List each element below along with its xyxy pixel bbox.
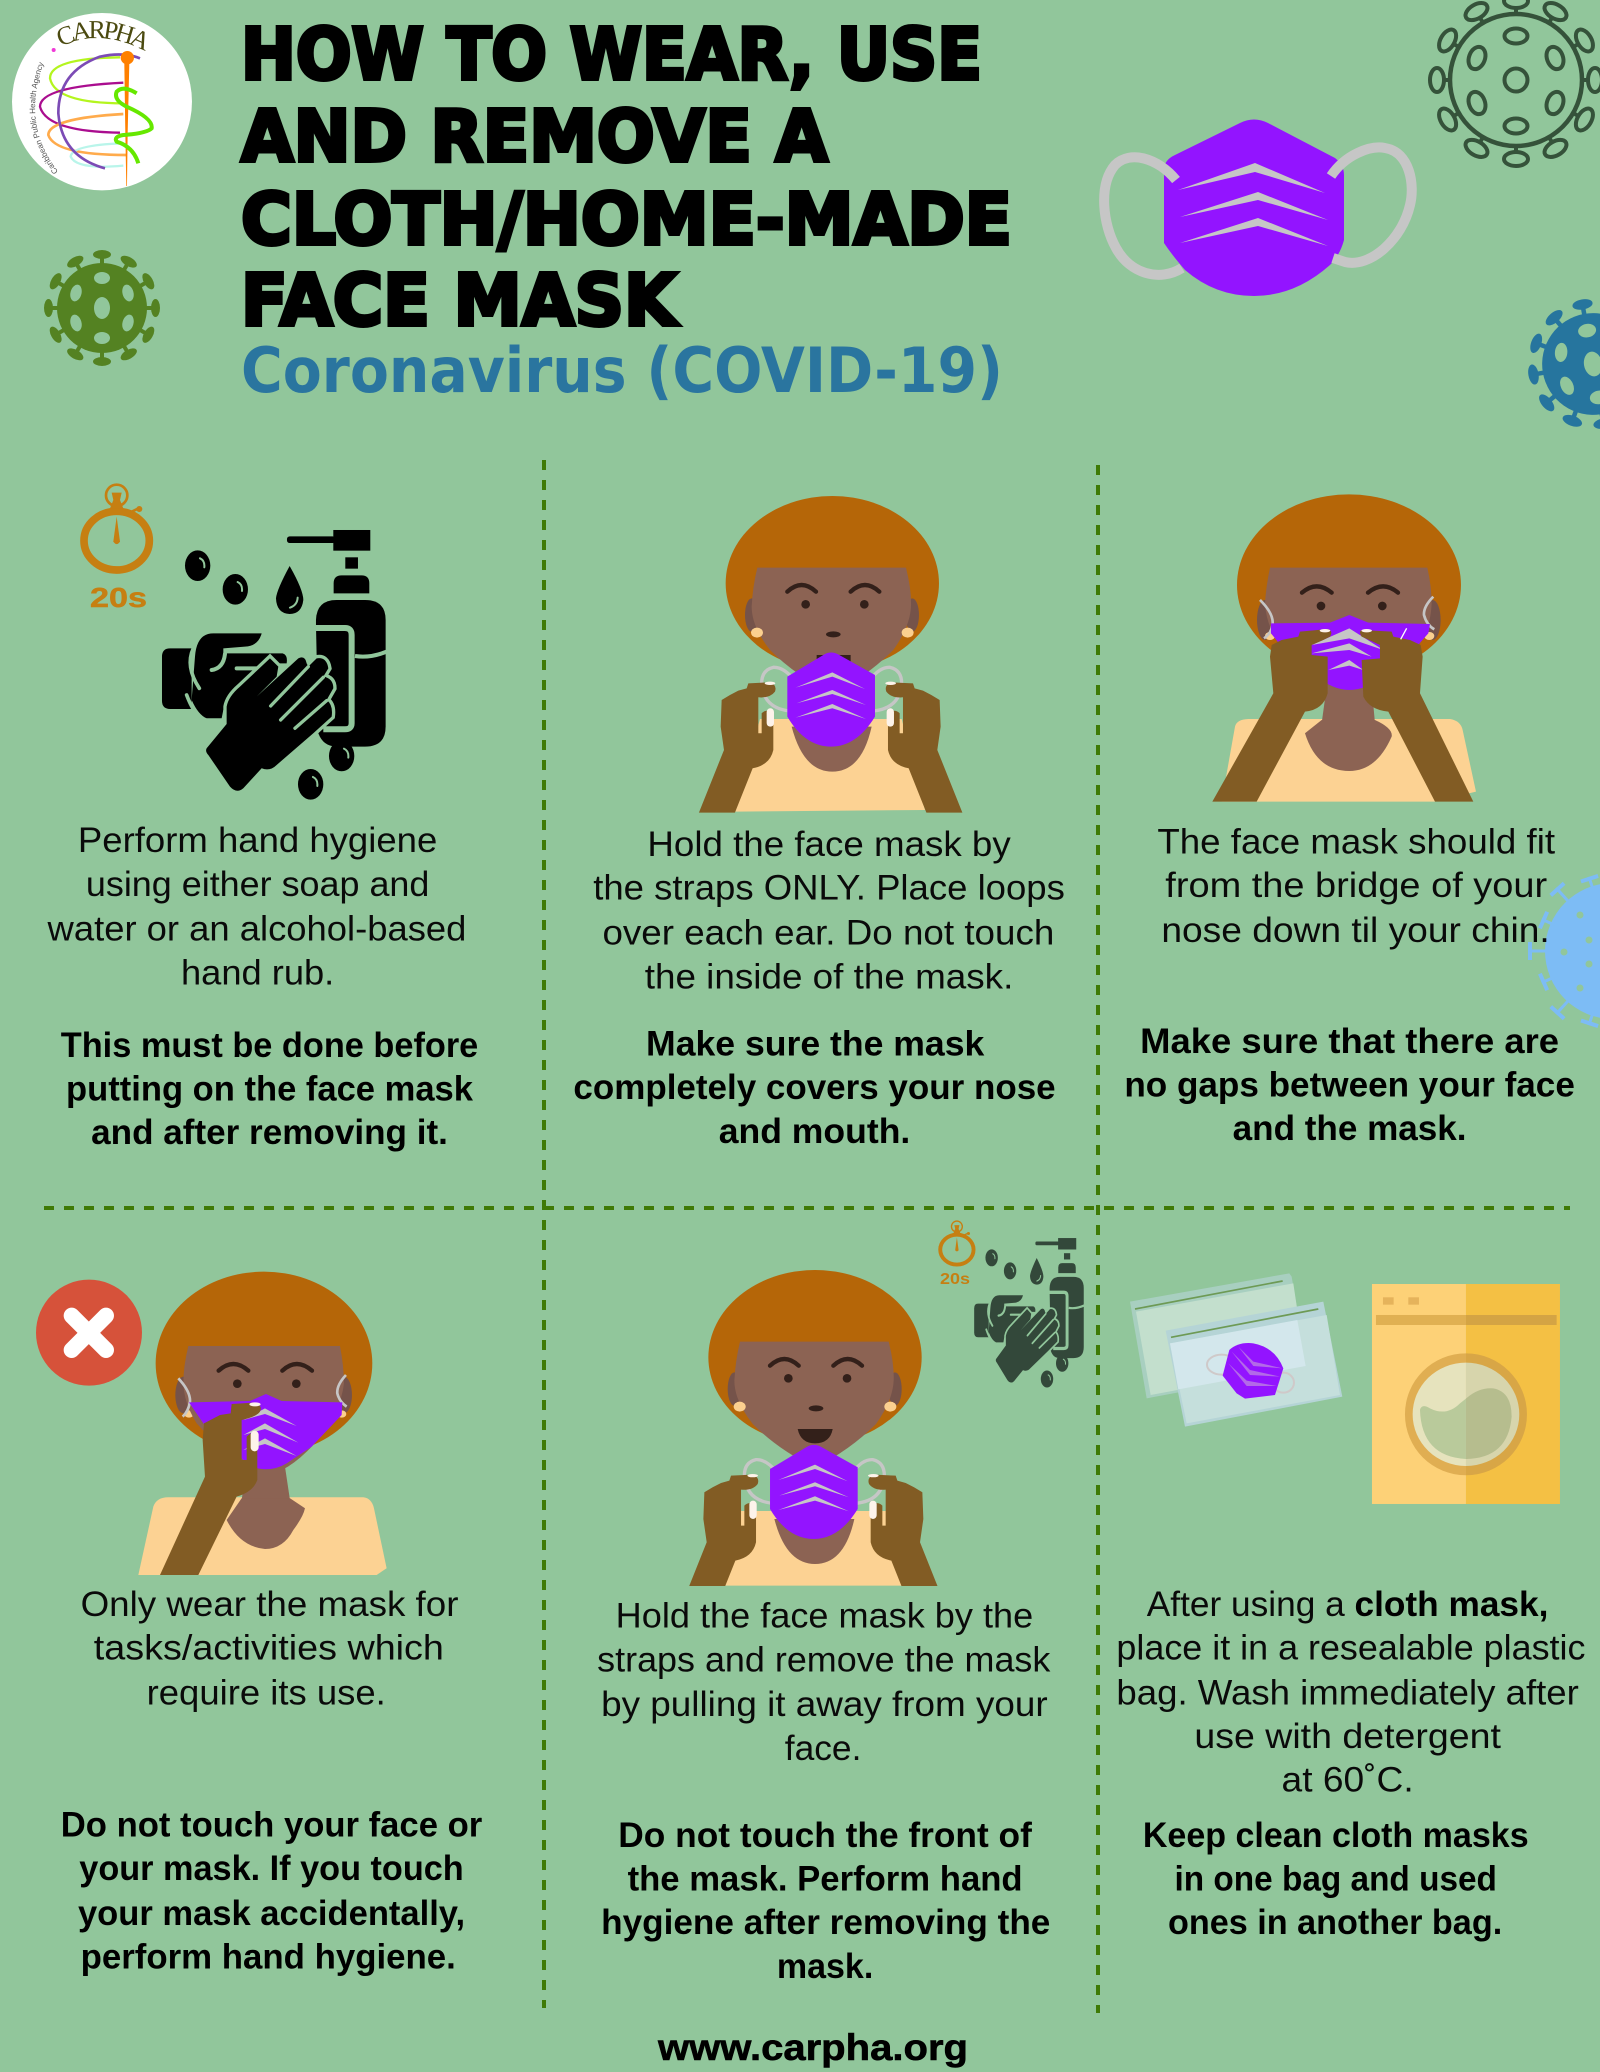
text: step 1 emphasis: [61, 1026, 478, 1152]
text: step 3 emphasis: and the mask.: [1233, 1109, 1467, 1148]
text: step 1 instructions: Perform hand hygiene: [78, 821, 437, 860]
text: step 2 instructions: [593, 825, 1065, 996]
text: step 6 emphasis: ones in another bag.: [1168, 1903, 1502, 1942]
illustration: washing machine: [1372, 1284, 1560, 1504]
text: step 3 instructions: [1157, 822, 1555, 950]
text: step 6 instructions: at 60˚C.: [1282, 1761, 1414, 1800]
text: step 2 emphasis: [573, 1025, 1056, 1151]
icon: light blue virus: [1528, 874, 1600, 1028]
text: step 1 instructions: [47, 821, 466, 992]
text: step 5 instructions: by pulling it away from your: [601, 1685, 1048, 1724]
logo: CARPHA: [12, 13, 192, 190]
logo: CARPHA: CARPHA: [58, 21, 146, 51]
text: step 5 emphasis: mask.: [777, 1947, 873, 1986]
text: step 6 instructions: After using a cloth mask,: [1147, 1585, 1548, 1624]
illustration: woman holding mask by straps: [699, 496, 962, 813]
icon: stopwatch: [84, 485, 149, 570]
text: step 5 instructions: [597, 1597, 1051, 1768]
text: step 5 emphasis: the mask. Perform hand: [628, 1860, 1023, 1899]
text: step 5 instructions: straps and remove the mask: [597, 1640, 1051, 1679]
text: step 6 instructions: use with detergent: [1194, 1717, 1501, 1756]
text: step 2 instructions: the inside of the mask.: [645, 957, 1013, 996]
text: step 1 emphasis: putting on the face mask: [66, 1070, 473, 1109]
icon: small hand washing: [974, 1238, 1084, 1387]
text: step 4 emphasis: perform hand hygiene.: [81, 1938, 456, 1977]
icon: outline virus: [1430, 0, 1600, 166]
text: step 4 instructions: [81, 1585, 459, 1712]
title: [241, 13, 1012, 342]
title: CLOTH/HOME-MADE: [241, 178, 1012, 261]
logo: CARPHA: Caribbean Public Health Agency: [30, 62, 58, 174]
text: step 2 instructions: over each ear. Do not touch: [602, 914, 1054, 953]
text: step 1 emphasis: and after removing it.: [91, 1113, 448, 1152]
icon: hand washing with soap: [162, 530, 387, 800]
text: step 2 emphasis: and mouth.: [719, 1112, 910, 1151]
text: step 5 emphasis: hygiene after removing the: [601, 1903, 1050, 1942]
text: step 6 emphasis: in one bag and used: [1175, 1860, 1497, 1899]
panel: step 5 remove the mask: [597, 1221, 1084, 1986]
title: FACE MASK: [241, 259, 680, 342]
panel: step 4 do not touch: [36, 1272, 483, 1977]
icon: large purple face mask: [1104, 120, 1412, 296]
icon: green virus: [44, 250, 160, 366]
panel: step 2 hold the mask: [573, 496, 1065, 1151]
text: step 5 instructions: face.: [785, 1729, 861, 1768]
text: step 2 emphasis: Make sure the mask: [646, 1025, 985, 1064]
illustration: smiling woman removing mask: [689, 1270, 938, 1586]
text: step 4 instructions: require its use.: [147, 1673, 386, 1712]
text: step 5 emphasis: Do not touch the front of: [618, 1816, 1032, 1855]
text: step 6 instructions: place it in a resealable plastic: [1116, 1628, 1585, 1667]
text: step 4 emphasis: your mask. If you touch: [79, 1849, 464, 1888]
text: step 4 instructions: tasks/activities which: [94, 1628, 444, 1667]
label: 20 seconds: 20s: [90, 582, 147, 613]
panel: step 1 hand hygiene: [47, 485, 478, 1152]
text: step 4 emphasis: [61, 1805, 483, 1977]
text: step 3 emphasis: no gaps between your face: [1124, 1066, 1575, 1105]
text: step 2 instructions: the straps ONLY. Place loops: [593, 869, 1065, 908]
panel: step 3 mask fit: [1124, 494, 1575, 1148]
text: step 2 instructions: Hold the face mask by: [647, 825, 1011, 864]
icon: red cross: [36, 1280, 142, 1386]
text: step 3 instructions: nose down til your chin.: [1161, 911, 1550, 950]
illustration: woman touching her mask: [138, 1272, 387, 1575]
text: step 6 instructions: bag. Wash immediately after: [1116, 1673, 1579, 1712]
subtitle: Coronavirus (COVID-19): [241, 334, 1003, 407]
text: step 3 emphasis: [1124, 1022, 1575, 1148]
text: step 3 emphasis: Make sure that there are: [1140, 1022, 1559, 1061]
text: step 1 instructions: using either soap and: [86, 865, 429, 904]
footer: website: www.carpha.org: [657, 2027, 968, 2068]
text: step 6 emphasis: Keep clean cloth masks: [1143, 1816, 1529, 1855]
text: step 5 instructions: Hold the face mask by the: [616, 1597, 1033, 1636]
text: step 1 instructions: water or an alcohol-based: [47, 910, 466, 949]
text: step 6 emphasis: [1143, 1816, 1529, 1942]
text: step 1 instructions: hand rub.: [181, 953, 334, 992]
illustration: woman fitting mask over nose: [1212, 494, 1476, 802]
text: step 4 emphasis: Do not touch your face or: [61, 1805, 483, 1844]
title: HOW TO WEAR, USE: [241, 13, 982, 96]
icon: blue virus: [1517, 288, 1600, 440]
text: step 4 emphasis: your mask accidentally,: [78, 1894, 465, 1933]
title: AND REMOVE A: [241, 95, 828, 178]
label: small 20 seconds: 20s: [940, 1271, 970, 1288]
panel: step 6 wash the mask: [1116, 1273, 1585, 1942]
text: step 3 instructions: from the bridge of your: [1165, 866, 1547, 905]
text: step 4 instructions: Only wear the mask for: [81, 1585, 459, 1624]
text: step 2 emphasis: completely covers your nose: [573, 1068, 1056, 1107]
illustration: mask in resealable plastic bags: [1130, 1273, 1342, 1427]
icon: small stopwatch: [940, 1221, 974, 1265]
text: step 1 emphasis: This must be done before: [61, 1026, 478, 1065]
text: step 5 emphasis: [601, 1816, 1050, 1986]
text: step 6 instructions: [1116, 1585, 1585, 1800]
text: step 3 instructions: The face mask should fit: [1157, 822, 1555, 861]
